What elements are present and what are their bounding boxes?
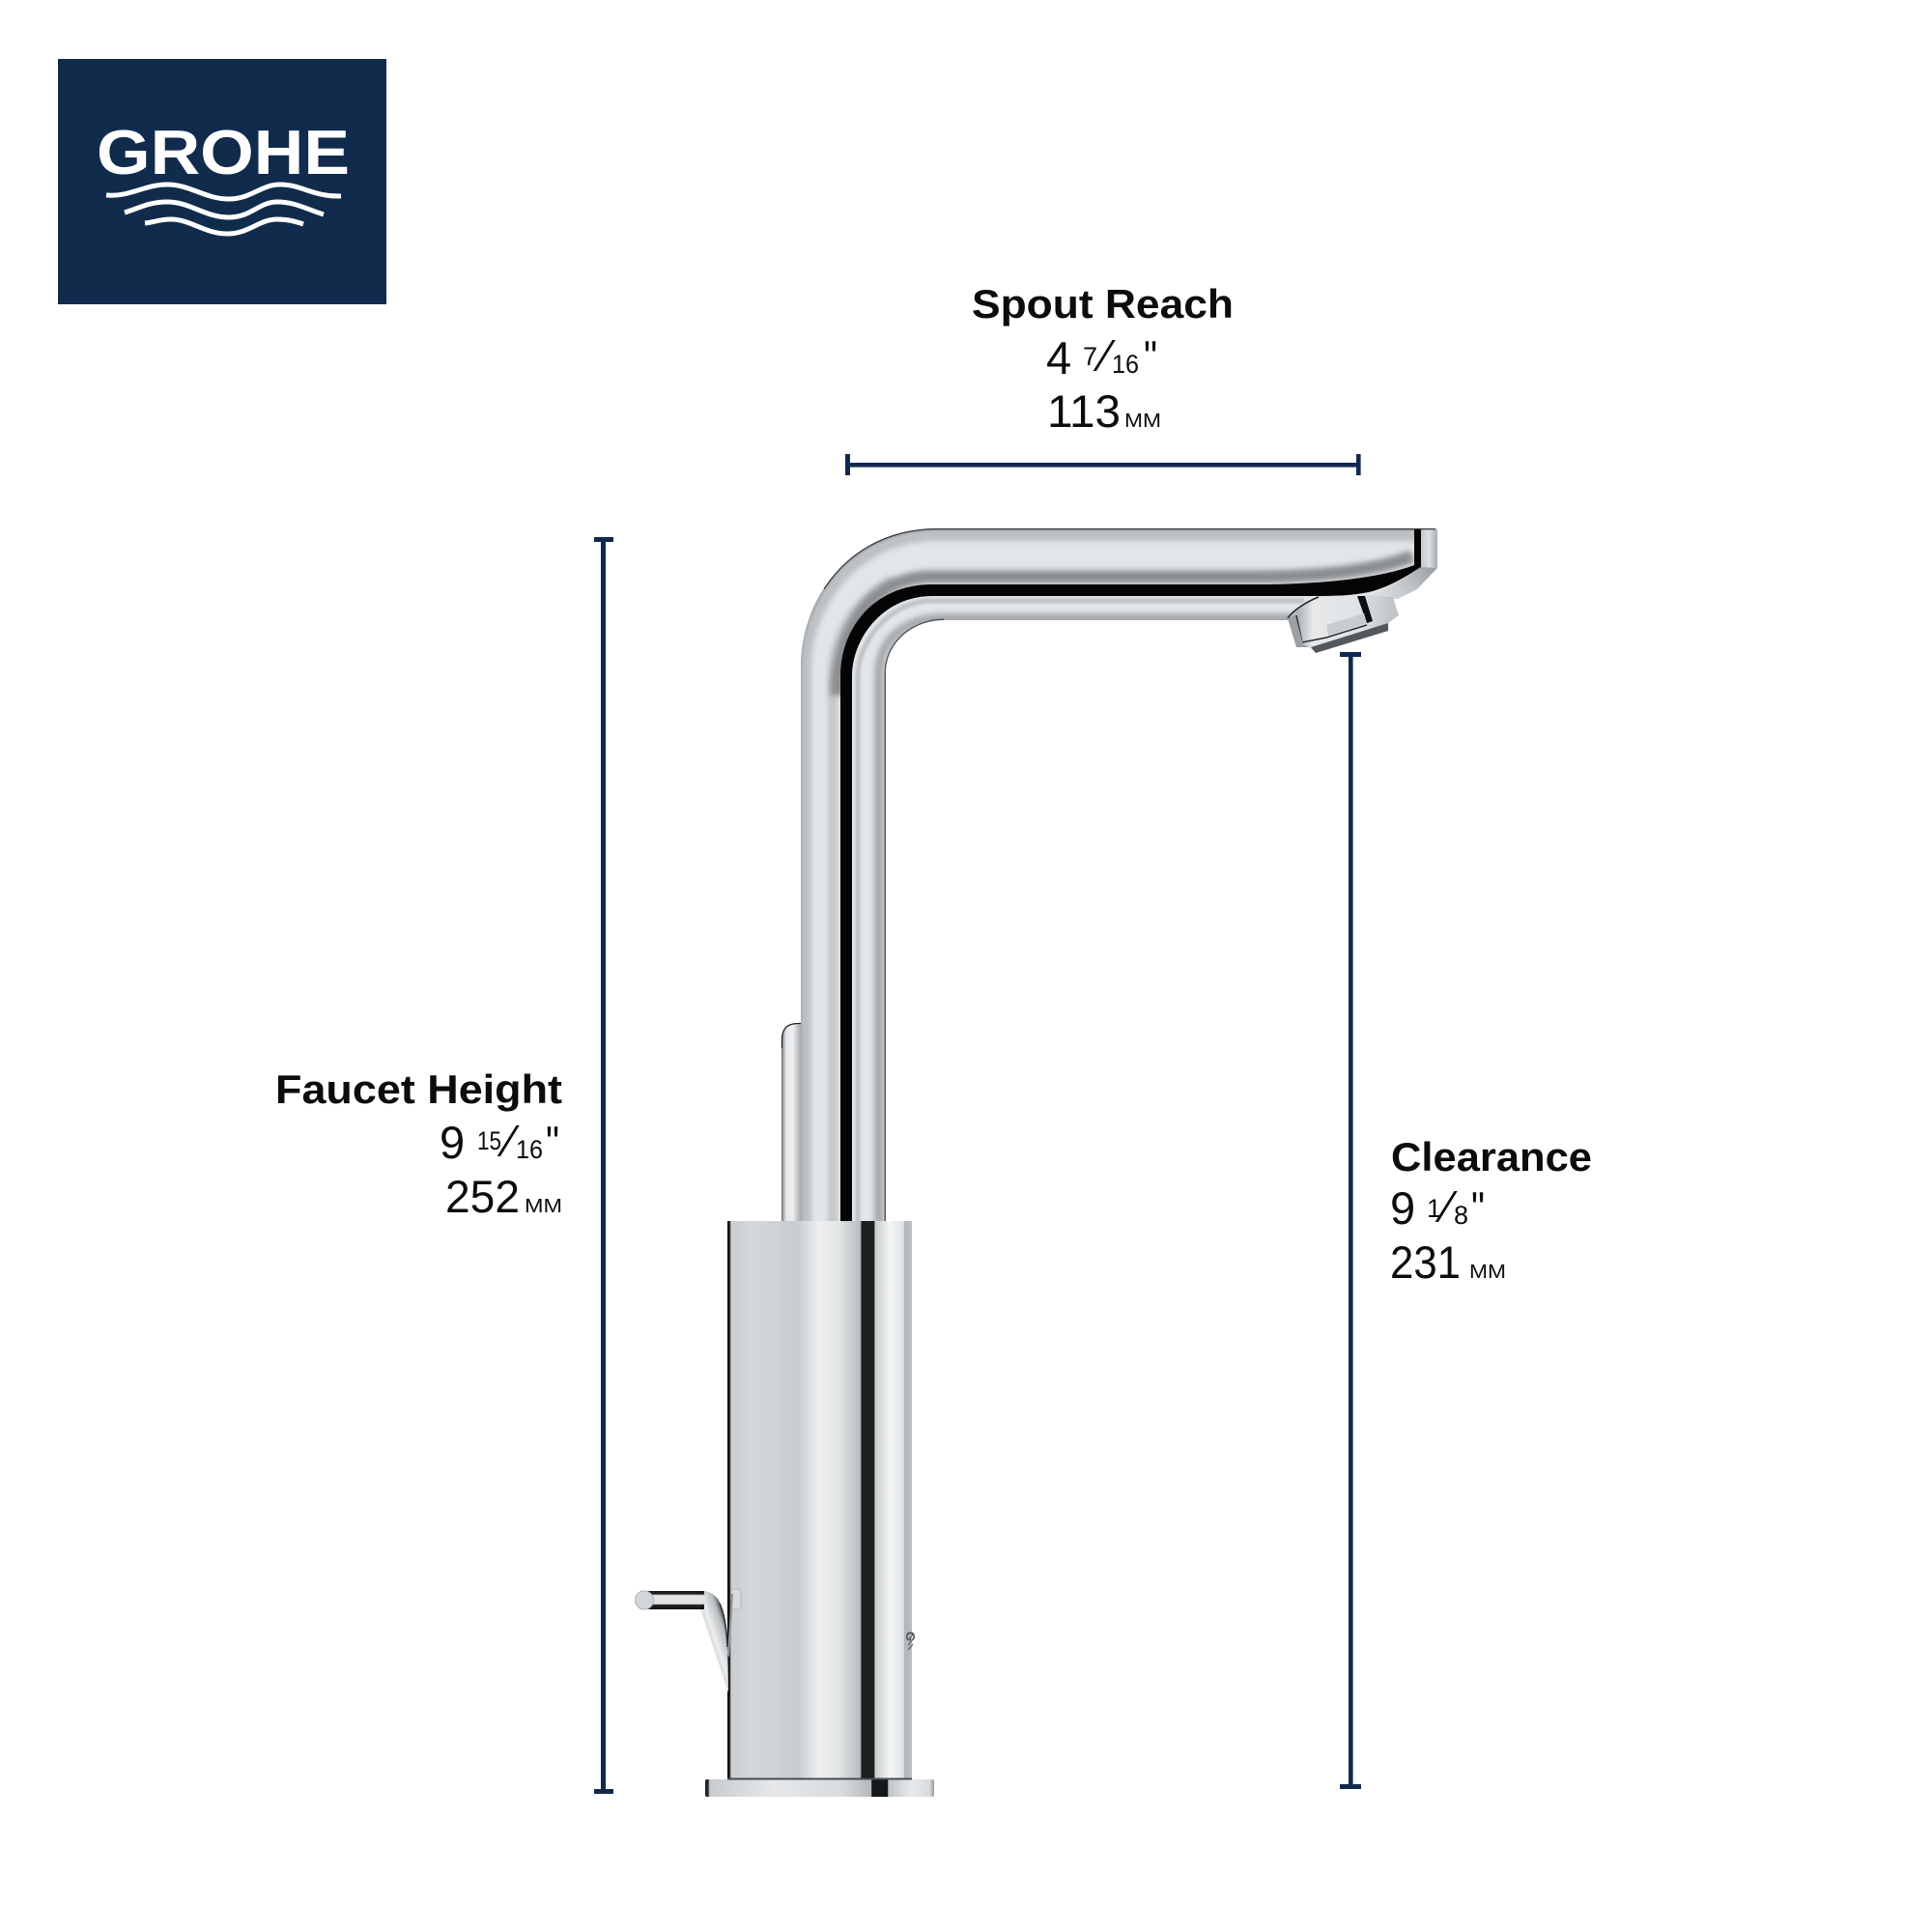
clearance label: 8 [1454, 1201, 1468, 1230]
base plate [705, 1777, 934, 1797]
faucet height label: Faucet Height [275, 1066, 562, 1112]
spout and riser [792, 522, 1449, 1227]
faucet height label: 9 [440, 1117, 465, 1168]
spout reach label: " [1144, 331, 1157, 383]
clearance label [1390, 1134, 1592, 1288]
clearance label: MM [1469, 1262, 1506, 1283]
clearance label: Clearance [1391, 1134, 1592, 1179]
spout reach label: 16 [1112, 350, 1139, 379]
spout reach label: 4 [1046, 332, 1071, 384]
faucet height label [275, 1066, 562, 1222]
clearance label: ⁄ [1435, 1181, 1458, 1232]
faucet height label: 252 [445, 1171, 520, 1222]
clearance dimension line [1340, 652, 1361, 1789]
clearance label: 231 [1390, 1236, 1461, 1288]
spout reach dimension line [845, 454, 1361, 475]
faucet height dimension line [594, 537, 613, 1794]
lever handle [781, 1023, 801, 1221]
engraved logo on body [903, 1632, 918, 1650]
GROHE logo: GROHE [97, 117, 350, 187]
GROHE logo [58, 59, 386, 304]
pop-up drain rod [636, 1589, 741, 1692]
spout reach label: ⁄ [1093, 330, 1116, 381]
clearance label: 9 [1390, 1182, 1415, 1234]
faucet height label: MM [525, 1196, 562, 1217]
faucet height label: 16 [516, 1135, 543, 1164]
dimension diagram page [58, 59, 1590, 1797]
spout reach label [972, 281, 1234, 437]
faucet height label: " [546, 1117, 559, 1168]
clearance label: " [1471, 1182, 1485, 1234]
spout reach label: Spout Reach [972, 281, 1234, 327]
clearance label: 1 [1427, 1194, 1441, 1223]
engraved logo on body: G [903, 1632, 918, 1641]
spout reach label: MM [1124, 411, 1161, 432]
faucet height label: 15 [477, 1126, 501, 1155]
spout reach label: 113 [1047, 385, 1121, 437]
spout reach label: 7 [1083, 342, 1097, 371]
faucet height label: ⁄ [497, 1116, 520, 1166]
faucet illustration [636, 522, 1449, 1797]
faucet body [727, 1221, 912, 1779]
aerator [1288, 595, 1399, 653]
